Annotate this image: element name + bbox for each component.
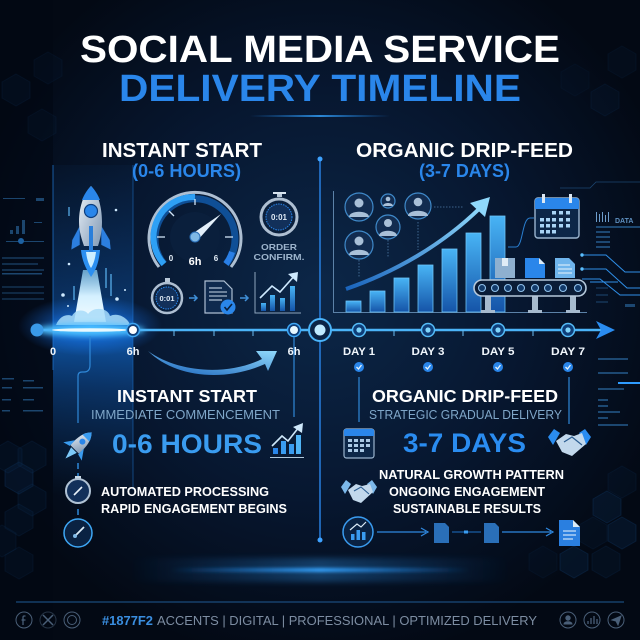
label: order confirm: ORDER [261,242,297,252]
timeline labels: 6h [288,346,301,358]
text block: instant start details: 0-6 HOURS [112,429,262,459]
timeline labels: DAY 1 [343,346,375,358]
gauge: 0 [169,254,174,263]
conveyor belt [474,258,586,313]
title: DELIVERY TIMELINE [119,68,521,110]
text block: instant start details: IMMEDIATE COMMENCEMENT [91,407,280,422]
text block: instant start details [91,386,280,459]
title: SOCIAL MEDIA SERVICE [80,29,560,71]
gauge [149,192,241,268]
text: benefits list: NATURAL GROWTH PATTERN [379,468,564,482]
text block: organic drip-feed details [369,386,562,458]
text block: organic drip-feed details: STRATEGIC GRADUAL DELIVERY [369,407,562,422]
text block: organic drip-feed details: ORGANIC DRIP-FEED [372,386,558,406]
heading: instant start: INSTANT START [102,140,262,162]
heading: organic drip-feed: ORGANIC DRIP-FEED [356,140,573,162]
text: benefits list [379,468,564,516]
icon: small rocket [56,423,101,468]
footer text: ACCENTS | DIGITAL | PROFESSIONAL | OPTIMIZED DELIVERY [157,613,537,628]
text block: organic drip-feed details: 3-7 DAYS [403,428,526,458]
data panel: right: DATA [615,218,633,225]
timeline labels: DAY 7 [551,346,585,358]
heading: organic drip-feed: (3-7 DAYS) [419,161,510,181]
label: order confirm [254,242,304,262]
icon: calendar [535,194,579,238]
flow: chart to documents [343,517,580,547]
text: automated processing: AUTOMATED PROCESSING [101,485,269,499]
bar chart: gradual growth [334,191,587,312]
heading: organic drip-feed [356,140,573,181]
text: benefits list: ONGOING ENGAGEMENT [389,485,545,499]
timeline labels: DAY 5 [482,346,514,358]
data panel: right [560,182,640,426]
footer social icons right [560,612,624,628]
footer social icons left [16,612,80,628]
process flow: stopwatch, document, chart [152,272,301,314]
icon: rocket launch [18,186,162,356]
timeline labels: DAY 3 [412,346,444,358]
icon: gauge clock [64,509,92,547]
footer divider [16,601,624,603]
timeline labels: 0 [50,346,56,358]
gauge: 6 [214,254,219,263]
process flow: stopwatch, document, chart: 0:01 [159,294,175,303]
footer text: #1877F2 [102,613,153,628]
center vertical divider [318,156,322,542]
connector lines [78,336,569,424]
icon: growth chart [270,423,304,458]
icon: handshake top [548,429,591,456]
label: order confirm: CONFIRM. [254,252,304,262]
timeline axis [30,319,615,341]
heading: instant start [102,140,262,181]
arrow: curved 0 to 6h [148,351,277,375]
text: automated processing [101,485,287,516]
text: benefits list: SUSTAINABLE RESULTS [393,502,541,516]
title [80,29,560,110]
gauge: 6h [189,256,202,268]
icon: stopwatch order confirm [261,192,297,235]
bottom light glow [130,558,510,582]
icon: stopwatch [66,476,90,503]
heading: instant start: (0-6 HOURS) [132,161,241,181]
icon: handshake lower [341,480,377,503]
data panel: left [2,198,44,412]
icon: small calendar [344,429,374,458]
panel: instant start highlight band [53,165,133,495]
connector dashes [77,463,79,478]
icon: stopwatch order confirm: 0:01 [271,213,288,222]
timeline labels [50,346,585,372]
text block: instant start details: INSTANT START [117,386,257,406]
text: automated processing: RAPID ENGAGEMENT BEGINS [101,502,287,516]
people avatars [345,193,463,278]
timeline labels: 6h [127,346,140,358]
